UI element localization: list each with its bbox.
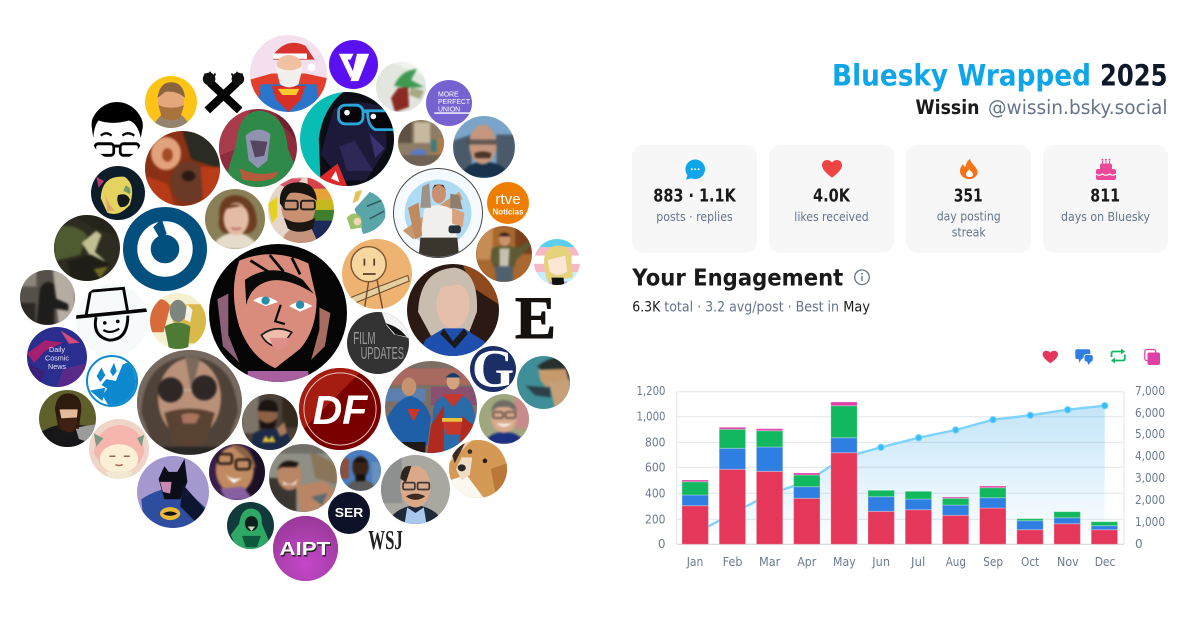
right axis labels [1135,384,1165,551]
avatar: RTVE Noticias logo: Noticias [492,207,524,216]
stat card: posts and replies: posts · replies [656,209,733,224]
stat card: posting streak: 351 [954,187,983,207]
avatar: AIPT logo [272,516,338,580]
avatar: hulk comic [150,293,206,349]
left axis labels: 200 [645,513,666,527]
month labels: Mar [759,555,780,569]
avatar: smiling man in navy [479,394,529,444]
stat card: days on Bluesky: 811 [1090,187,1120,207]
month labels: Dec [1095,555,1115,569]
left axis labels [636,384,666,551]
avatar: RTVE Noticias logo: rtve [495,191,521,208]
avatar: cartoon face with pencil [342,239,412,309]
avatar: More Perfect Union logo: PERFECT [438,99,471,106]
avatar: Daily Cosmic News: Cosmic [45,354,69,363]
left axis labels: 800 [645,436,666,450]
avatar: smiling man in suit [380,454,450,524]
panel: avatar bubble cloud [20,35,580,581]
avatar: darth vader with blue glasses [300,92,394,186]
left axis labels: 600 [645,461,666,475]
engagement summary text: May [843,300,870,316]
right axis labels: 5,000 [1135,427,1165,441]
stat card: likes: likes received [794,209,869,224]
avatar: Daily Cosmic News: Daily [49,345,65,354]
avatar: Film Updates logo [347,312,409,374]
heading: your engagement: Your Engagement [631,266,843,292]
icon: flame [960,159,978,179]
avatar: sketch man in hat [76,284,148,356]
month labels: Feb [723,555,742,569]
right axis labels: 7,000 [1135,384,1165,398]
month labels: Jun [871,555,890,569]
avatar: batman [137,456,209,528]
stat card: posting streak: day posting [937,209,1001,224]
icon: info [855,270,869,285]
avatar: blurry red close-up photo [144,130,220,206]
stat card: likes: 4.0K [813,187,851,207]
right axis labels: 3,000 [1135,471,1165,485]
panel: right column with header, stats and chart [631,59,1168,569]
avatar: flying fairy illustration [346,190,386,234]
stat card: days on Bluesky [1043,145,1168,253]
bars: likes [682,453,1118,544]
avatar: yellow cartoon bearded man [145,76,197,128]
avatar: man with Michigan shirt [242,394,298,450]
month labels: Apr [797,555,816,569]
engagement summary text: total · 3.2 avg/post · Best in [664,300,839,316]
avatar: crossed black arms logo [202,72,244,114]
month labels: Oct [1021,555,1040,569]
right axis labels: 0 [1135,537,1143,551]
right axis labels: 1,000 [1135,515,1165,529]
month labels: Sep [983,555,1003,569]
avatar: green hooded hero [226,502,274,548]
avatar: More Perfect Union logo: MORE [438,92,459,99]
avatar: pop art woman, largest bubble [209,244,347,382]
left axis labels: 0 [658,537,666,551]
left axis labels: 1,000 [636,409,666,423]
avatar: laughing man with glasses [209,444,265,500]
avatar: blue ring logo [123,207,207,291]
avatar: santa superman [250,34,326,112]
left axis labels: 400 [645,487,666,501]
avatar: long-haired man with round sunglasses [136,350,242,454]
stat card: posting streak: streak [952,225,986,240]
avatar: man in green jacket [476,226,532,282]
avatar: shirtless smiling man with cat [269,444,337,512]
avatar: Daily Cosmic News: News [48,362,66,371]
bars: quotes [682,402,1006,498]
avatar: RTVE Noticias logo [487,182,529,224]
avatar: DF red emblem [299,368,381,450]
avatar: man beside superman statue [385,361,477,453]
left axis labels: 1,200 [636,384,666,398]
avatar: SER logo: SER [335,506,363,520]
avatar: muscled man with cats [393,168,483,258]
icon: legend likes heart [1043,351,1058,363]
month labels: Nov [1057,555,1079,569]
stat card: posting streak [906,145,1031,253]
avatar: SER logo [328,492,370,534]
stat card: days on Bluesky: days on Bluesky [1061,209,1150,224]
avatar: Daily Cosmic News [27,327,87,387]
icon: legend replies bubbles [1075,349,1093,365]
avatar: man in gray hoodie [340,450,380,490]
right axis labels: 6,000 [1135,406,1165,420]
stat card: posts and replies: 883 · 1.1K [653,187,737,207]
engagement summary text: 6.3K [632,300,661,316]
avatar: woman with red hair [205,189,265,249]
chart legend icons [1043,348,1160,365]
icon: legend quotes copy squares [1145,350,1160,365]
avatar: blonde illustrated figure [91,166,145,220]
user name and handle: @wissin.bsky.social [988,96,1168,119]
avatar: Film Updates logo: FILM [353,328,376,348]
avatar: bald man with city view [453,116,515,178]
title: 2025 [1100,59,1168,93]
avatar: teal painted woman [516,356,570,408]
avatar: More Perfect Union logo: UNION [438,106,460,113]
chart grid and axes [677,392,1124,544]
avatar: line-art man with glasses [92,102,143,157]
avatar: black and white piano photo [20,270,74,324]
avatar: man with glasses and pride flag [268,177,334,243]
avatar: purple V logo [328,40,378,88]
avatar: green frog painting [54,215,120,281]
month labels [686,555,1115,569]
avatar: Europe map logo [86,355,138,407]
avatar: cartoon bearded man [38,390,96,446]
title: Bluesky Wrapped [832,59,1091,93]
month labels: May [833,555,856,569]
bars: reposts [682,406,1118,526]
icon: heart [822,160,842,178]
icon: legend reposts arrows [1111,348,1125,364]
avatar: AIPT logo: AIPT [280,540,331,560]
month labels: Jul [910,555,925,569]
avatar: AIPT logo: AIPT [279,539,330,559]
icon: speech bubble [685,160,705,180]
bars: replies [682,438,1118,530]
icon: birthday cake [1096,159,1116,180]
chart: monthly engagement stacked bars with cumulative line [636,384,1165,569]
month labels: Jan [686,555,703,569]
avatar: blonde woman in blue jersey [407,264,499,356]
month labels: Aug [946,555,966,569]
avatar: DF red emblem: DF [313,387,368,433]
avatar: room with furniture photo [398,120,444,166]
avatar: golden dog [449,440,507,498]
cumulative area and line [695,402,1108,544]
user name and handle [916,96,1168,119]
avatar: blonde cartoon with trans flag [534,239,580,285]
avatar: green-haired figure [376,62,426,112]
avatar: More Perfect Union logo [426,80,472,126]
stat card: likes [769,145,894,253]
stat card: posts and replies [632,145,757,253]
right axis labels: 2,000 [1135,493,1165,507]
right axis labels: 4,000 [1135,449,1165,463]
user name and handle: Wissin [916,96,980,119]
avatar: doctor doom [219,109,297,187]
avatar: anime girl with pink hair [89,419,149,479]
